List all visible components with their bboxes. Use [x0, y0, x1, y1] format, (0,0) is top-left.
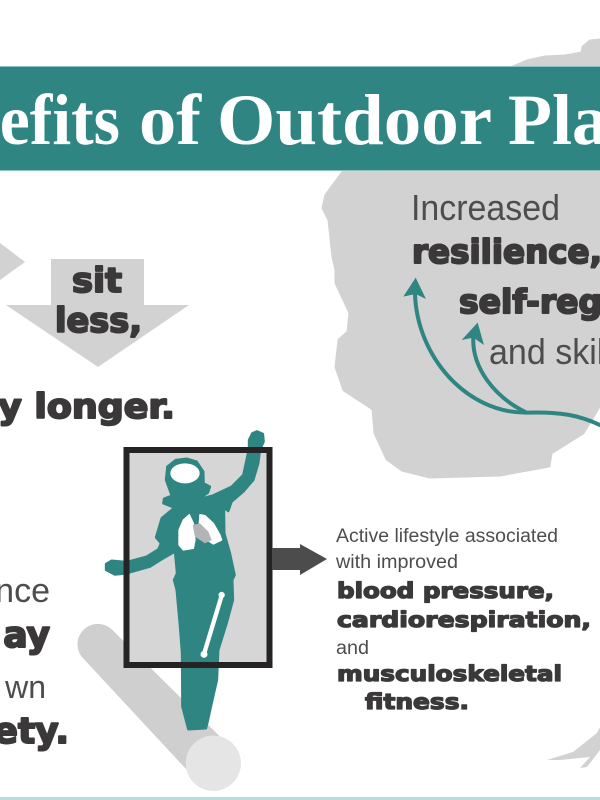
log	[77, 624, 241, 791]
arrow: sit less	[6, 259, 189, 367]
text: left lower fragments	[0, 572, 69, 752]
text block: active lifestyle	[335, 526, 591, 714]
child silhouette with organs	[106, 431, 264, 729]
text block: active lifestyle: with improved	[335, 552, 458, 573]
icon: lungs	[179, 515, 222, 550]
text block: active lifestyle: fitness.	[365, 690, 469, 714]
frame border	[126, 450, 270, 665]
title banner	[0, 66, 600, 171]
text: left lower fragments: ay	[3, 615, 50, 656]
text: less: less,	[55, 301, 142, 341]
arrow: partial right-pointing	[0, 243, 25, 280]
text: left lower fragments: wn	[4, 669, 46, 705]
icon: heart	[193, 523, 212, 543]
frame panel	[126, 450, 270, 665]
bottom rule	[0, 797, 600, 800]
text block: active lifestyle: Active lifestyle associated	[336, 526, 558, 547]
arrow: frame to fitness text	[272, 544, 327, 575]
teal branching arrows	[403, 278, 600, 427]
title banner: of	[139, 80, 202, 160]
text: play longer: y longer.	[0, 387, 175, 427]
icon: bone	[201, 592, 225, 658]
text block: active lifestyle: cardiorespiration,	[337, 608, 591, 632]
text block: active lifestyle: and	[336, 638, 369, 659]
text block: active lifestyle: musculoskeletal	[337, 662, 562, 686]
grey landmass background	[323, 40, 600, 477]
text: sit: sit	[72, 261, 122, 301]
title banner: Outdoor	[217, 80, 492, 160]
grey landmass lower right	[547, 727, 600, 768]
text: increased: Increased	[411, 187, 560, 228]
text: resilience: resilience,	[412, 232, 600, 271]
icon: brain	[170, 463, 200, 483]
text block: active lifestyle: blood pressure,	[337, 579, 554, 603]
